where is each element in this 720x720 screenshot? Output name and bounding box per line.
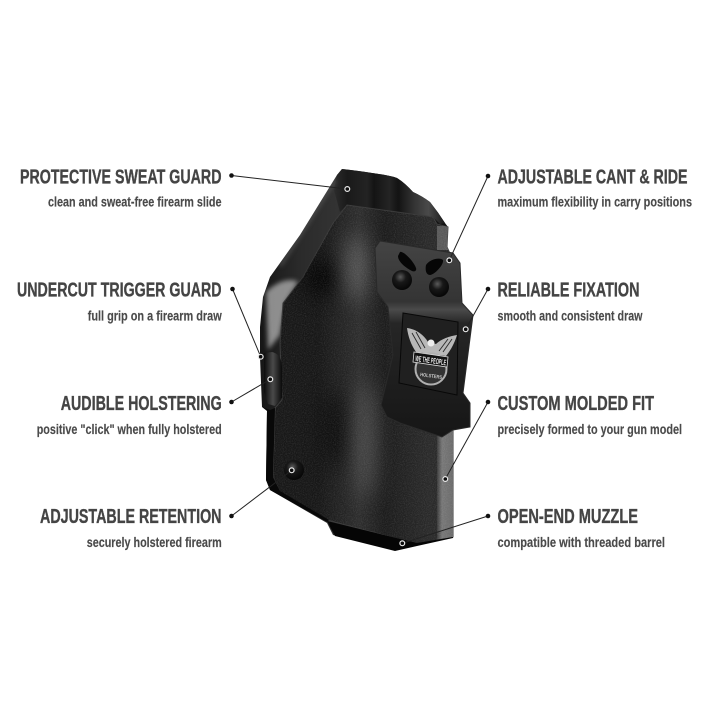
callout: adjustable retention: securely holstered firearm (87, 535, 222, 550)
clip slots (398, 252, 443, 275)
callout: undercut trigger guard: UNDERCUT TRIGGER GUARD (17, 280, 222, 302)
callout: audible holstering (37, 377, 273, 437)
logo: We The People Holsters: WE THE PEOPLE (415, 354, 447, 367)
belt clip plate (375, 241, 473, 437)
sweat guard highlights (266, 180, 335, 350)
textured front shell (273, 205, 453, 544)
sweat guard top band (334, 169, 445, 224)
shell shading and texture (274, 205, 453, 542)
callout: audible holstering: AUDIBLE HOLSTERING (61, 393, 222, 415)
callout: open-end muzzle: OPEN-END MUZZLE (498, 506, 638, 528)
callout: open-end muzzle (400, 506, 665, 550)
logo: We The People Holsters: HOLSTERS (420, 372, 443, 381)
callout: adjustable cant and ride (447, 166, 692, 263)
logo: We The People Holsters (407, 328, 457, 384)
audible click bulge (264, 352, 282, 406)
callout: undercut trigger guard: full grip on a firearm draw (88, 309, 222, 324)
callout: protective sweat guard: clean and sweat-free firearm slide (48, 195, 222, 210)
logo panel (399, 313, 458, 395)
back shell: sweat guard (260, 169, 453, 550)
lower muzzle lip (327, 521, 453, 551)
callout: custom molded fit (443, 393, 682, 481)
muzzle side strip (437, 430, 453, 540)
callout: custom molded fit: CUSTOM MOLDED FIT (498, 393, 654, 415)
callout: undercut trigger guard (17, 280, 263, 359)
callout: protective sweat guard (20, 166, 350, 210)
callout: audible holstering: positive "click" when fully holstered (37, 422, 222, 437)
holster illustration (260, 169, 473, 551)
callout: reliable fixation (463, 280, 643, 332)
callout: protective sweat guard: PROTECTIVE SWEAT GUARD (20, 166, 222, 188)
callout: reliable fixation: RELIABLE FIXATION (498, 280, 640, 302)
callout: reliable fixation: smooth and consistent draw (498, 309, 643, 324)
callout: open-end muzzle: compatible with threaded barrel (498, 535, 665, 550)
clip bolts (392, 270, 449, 297)
callout: adjustable retention: ADJUSTABLE RETENTION (40, 506, 222, 528)
trigger guard rim (262, 407, 329, 522)
adjustable retention screw (284, 460, 304, 480)
callout: adjustable retention (40, 468, 294, 550)
